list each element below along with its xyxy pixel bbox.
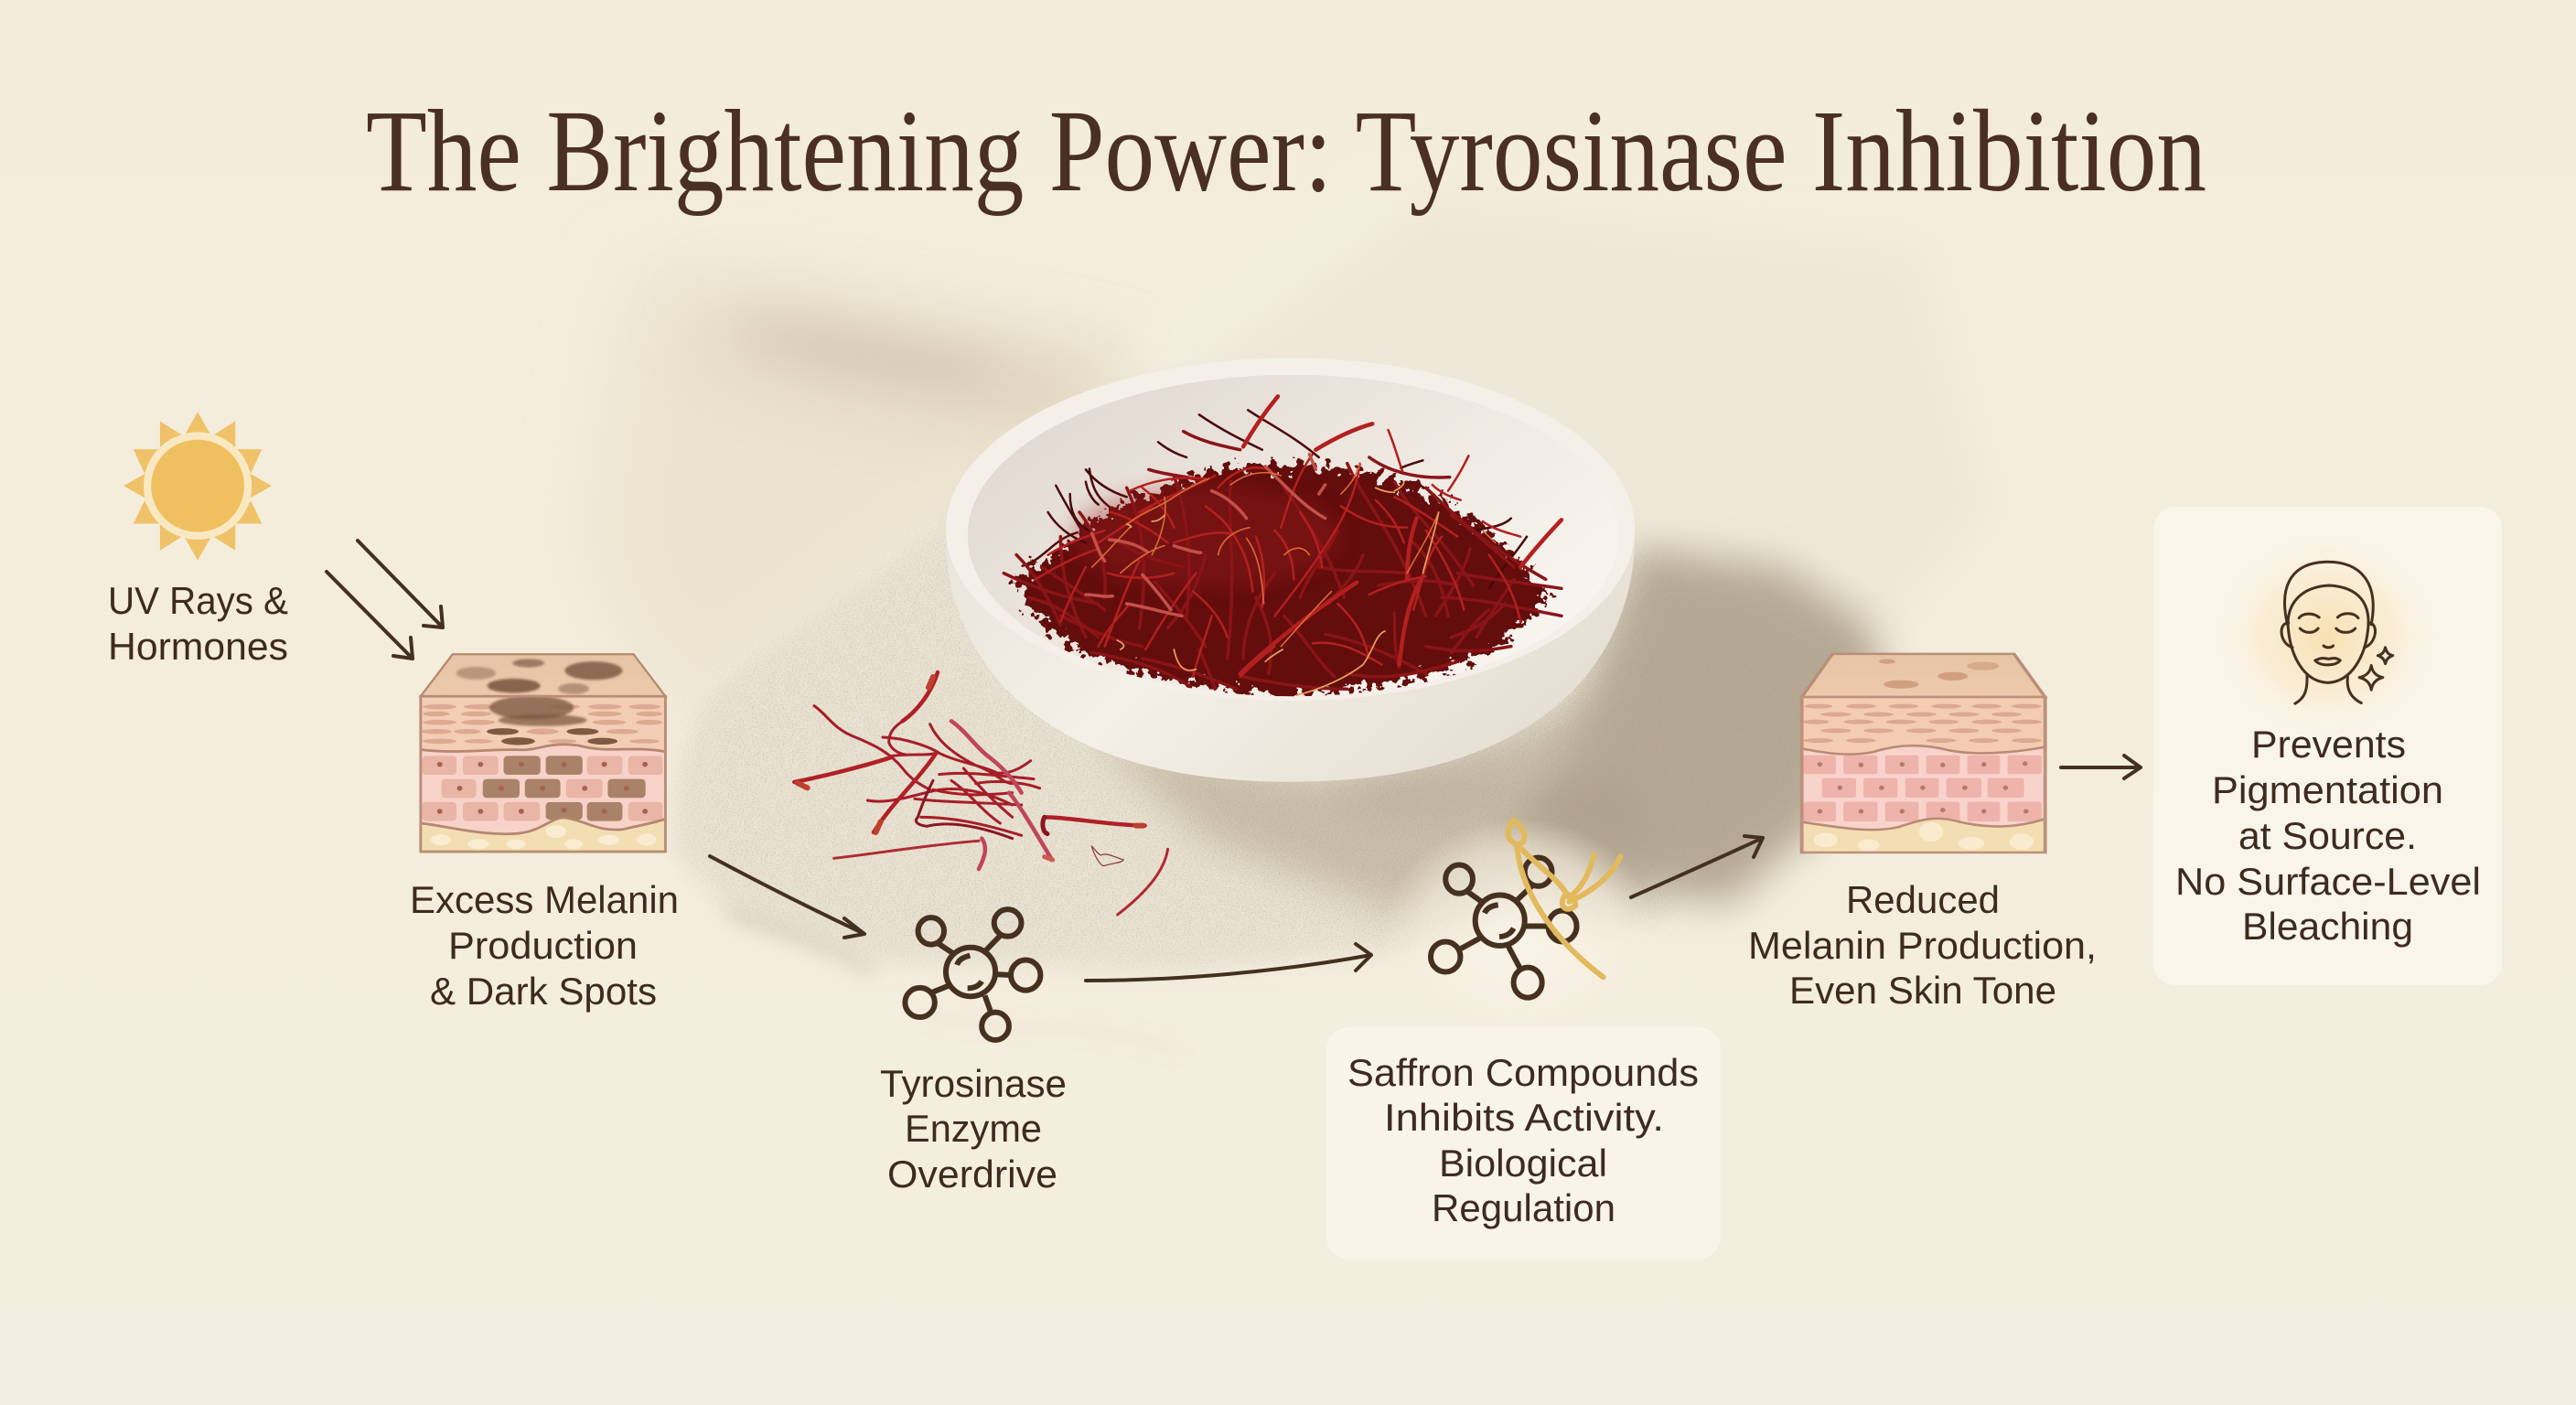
skin layers (421, 696, 665, 852)
panel: prevents pigmentation (2153, 507, 2502, 985)
label: reduced melanin: Melanin Production, (1748, 924, 2097, 967)
panel text: No Surface-Level (2175, 860, 2481, 903)
sparkles (2359, 648, 2393, 690)
label: excess melanin: Excess Melanin (410, 878, 679, 921)
label: tyrosinase: Enzyme (905, 1107, 1042, 1150)
arrow: UV rays B (327, 572, 413, 659)
skin cells (1803, 756, 2042, 821)
bowl body (946, 535, 1635, 782)
label: reduced melanin (1748, 878, 2097, 1012)
label: excess melanin: Production (448, 924, 638, 967)
title: The Brightening Power: Tyrosinase Inhibition (366, 86, 2206, 216)
gold saffron threads (1508, 820, 1621, 977)
icon: glow behind saffron molecule (1381, 819, 1656, 1047)
skin top surface (1802, 654, 2045, 697)
icon: sun (123, 412, 272, 561)
fat layer (421, 818, 665, 852)
label: tyrosinase (880, 1062, 1067, 1196)
icon: inhibited molecule with saffron threads (1431, 820, 1621, 998)
icon: bowl of saffron (946, 359, 1635, 782)
icon: even-toned skin (1802, 654, 2045, 853)
panel text: at Source. (2238, 814, 2417, 857)
skin top surface (421, 654, 665, 696)
arrow: to result panel (2061, 756, 2141, 778)
panel text (1347, 1051, 1699, 1229)
icon: serene face (2281, 562, 2393, 703)
label: excess melanin (410, 878, 679, 1013)
arrow: melanin to enzyme (710, 856, 864, 938)
arrow: saffron to reduced melanin (1631, 836, 1763, 897)
dark melanin spots (456, 659, 622, 745)
sun rays (123, 412, 272, 561)
icon: loose saffron threads (794, 672, 1168, 915)
panel text (2175, 723, 2481, 948)
sun disc (144, 432, 252, 540)
icon: tyrosinase molecule (905, 909, 1040, 1040)
label: UV rays (108, 579, 288, 668)
icon: face glow (2213, 531, 2442, 741)
panel text: Bleaching (2242, 905, 2413, 948)
label: tyrosinase: Tyrosinase (880, 1062, 1067, 1105)
saffron pile (1004, 396, 1562, 695)
panel text: Biological (1439, 1142, 1607, 1185)
panel text: Pigmentation (2212, 768, 2443, 811)
fold lines (678, 194, 1389, 1052)
label: UV rays: UV Rays & (108, 579, 288, 622)
label: UV rays: Hormones (108, 625, 288, 668)
cloth shadows (704, 306, 1894, 906)
skin layers (1802, 697, 2045, 853)
bowl interior (968, 375, 1618, 696)
fat layer (1802, 819, 2045, 853)
panel text: Inhibits Activity. (1384, 1096, 1664, 1139)
panel text: Saffron Compounds (1347, 1051, 1699, 1094)
label: reduced melanin: Even Skin Tone (1789, 969, 2056, 1012)
label: reduced melanin: Reduced (1846, 878, 2000, 921)
bowl rim (946, 359, 1635, 701)
icon: skin with dark spots (421, 654, 665, 852)
panel text: Prevents (2251, 723, 2406, 766)
arrow: UV rays A (358, 541, 443, 627)
panel text: Regulation (1432, 1186, 1615, 1229)
arrow: enzyme to saffron (1086, 944, 1371, 981)
label: tyrosinase: Overdrive (887, 1153, 1057, 1196)
label: excess melanin: & Dark Spots (430, 970, 657, 1013)
skin cells (422, 756, 663, 821)
linen cloth background (595, 194, 1994, 1052)
panel: saffron compounds (1326, 1027, 1721, 1259)
